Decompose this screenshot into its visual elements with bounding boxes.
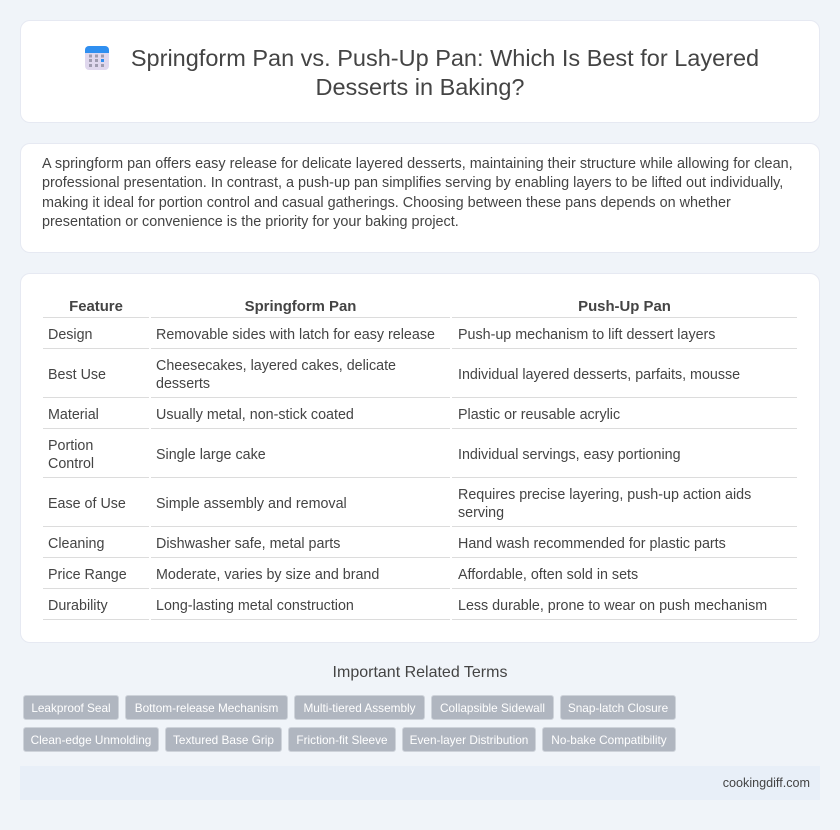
comparison table: Individual servings, easy portioning xyxy=(458,447,681,463)
header row xyxy=(69,299,671,315)
related terms heading: Important Related Terms xyxy=(333,664,507,681)
comparison table: Durability xyxy=(48,598,108,614)
comparison table: Removable sides with latch for easy release xyxy=(156,327,435,343)
comparison table: desserts xyxy=(156,376,210,392)
title card xyxy=(20,20,820,123)
intro text: presentation or convenience is the priority for your baking project. xyxy=(42,214,459,230)
comparison table: Individual layered desserts, parfaits, mousse xyxy=(458,367,740,383)
header row: Push-Up Pan xyxy=(578,299,671,315)
comparison table: Cleaning xyxy=(48,536,104,552)
header row: Springform Pan xyxy=(245,299,356,315)
comparison table: Single large cake xyxy=(156,447,266,463)
title: Desserts in Baking? xyxy=(316,74,524,100)
intro text: professional presentation. In contrast, a push-up pan simplifies serving by enabling layers to be lifted out individually, xyxy=(42,175,783,191)
comparison table: serving xyxy=(458,505,504,521)
related terms tags: Even-layer Distribution xyxy=(410,733,528,747)
related terms tags: Collapsible Sidewall xyxy=(440,701,545,715)
related terms tags: Multi-tiered Assembly xyxy=(303,701,416,715)
comparison table: Cheesecakes, layered cakes, delicate xyxy=(156,358,396,374)
intro text: A springform pan offers easy release for delicate layered desserts, maintaining their structure while allowing for clean, xyxy=(42,156,793,172)
intro text: making it ideal for portion control and casual gatherings. Choosing between these pans depends on whether xyxy=(42,195,731,211)
comparison table: Design xyxy=(48,327,93,343)
comparison table: Price Range xyxy=(48,567,127,583)
comparison table: Usually metal, non-stick coated xyxy=(156,407,354,423)
comparison table: Portion xyxy=(48,438,93,454)
icon: calendar xyxy=(85,46,109,70)
comparison table: Material xyxy=(48,407,99,423)
related terms tags: Clean-edge Unmolding xyxy=(31,733,151,747)
title: Springform Pan vs. Push-Up Pan: Which Is Best for Layered xyxy=(131,45,759,71)
header row: Feature xyxy=(69,299,123,315)
comparison table: Plastic or reusable acrylic xyxy=(458,407,620,423)
comparison table: Control xyxy=(48,456,94,472)
comparison table: Long-lasting metal construction xyxy=(156,598,354,614)
comparison table: Moderate, varies by size and brand xyxy=(156,567,379,583)
related terms tags: Leakproof Seal xyxy=(31,701,111,715)
comparison table xyxy=(43,299,797,620)
footer source: cookingdiff.com xyxy=(723,776,810,790)
related terms tags: Bottom-release Mechanism xyxy=(135,701,278,715)
comparison table: Push-up mechanism to lift dessert layers xyxy=(458,327,715,343)
comparison table: Requires precise layering, push-up action aids xyxy=(458,487,751,503)
comparison table: Ease of Use xyxy=(48,496,126,512)
comparison table: Less durable, prone to wear on push mechanism xyxy=(458,598,767,614)
intro panel xyxy=(20,143,820,253)
related terms tags: Textured Base Grip xyxy=(173,733,274,747)
comparison table: Best Use xyxy=(48,367,106,383)
related terms tags: No-bake Compatibility xyxy=(551,733,667,747)
comparison table: Hand wash recommended for plastic parts xyxy=(458,536,726,552)
footer bar xyxy=(20,766,820,800)
related terms tags: Snap-latch Closure xyxy=(568,701,668,715)
comparison table: Simple assembly and removal xyxy=(156,496,347,512)
intro text xyxy=(42,156,793,230)
comparison table: Dishwasher safe, metal parts xyxy=(156,536,340,552)
table panel xyxy=(20,273,820,643)
title xyxy=(131,45,759,100)
related terms tags: Friction-fit Sleeve xyxy=(296,733,388,747)
related terms tags xyxy=(23,695,676,752)
comparison table: Affordable, often sold in sets xyxy=(458,567,638,583)
